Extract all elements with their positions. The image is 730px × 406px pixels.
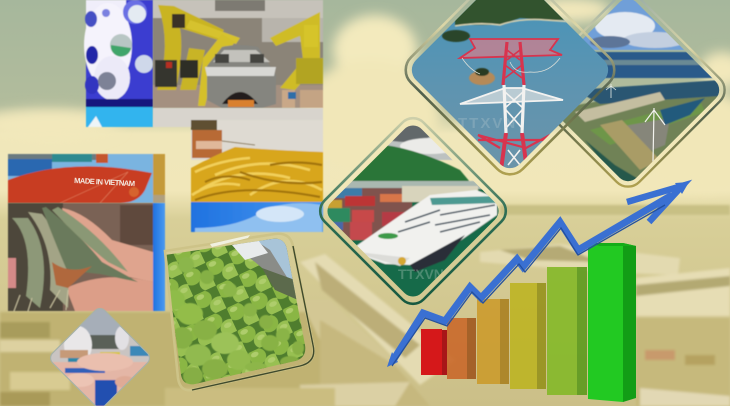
3D bar chart — [421, 243, 636, 402]
bar: orange — [447, 318, 476, 379]
bar: red — [421, 329, 447, 375]
durian frame — [165, 234, 314, 390]
bar: amber — [477, 299, 509, 384]
photo: rice harvest — [153, 108, 323, 232]
wind farm frame — [525, 0, 730, 193]
power pylon frame — [398, 0, 622, 182]
rising blue arrow — [387, 182, 689, 367]
watermark: TTXVN — [398, 266, 444, 282]
photo: biotech molecule hand — [84, 0, 153, 127]
bar: green — [588, 243, 636, 402]
photo: cruise ship and container port with frame — [318, 117, 508, 306]
photo: seafood processing workers — [50, 308, 150, 406]
photo: durian fruit pile with frame — [160, 230, 315, 390]
port frame — [314, 112, 512, 310]
watermark: TTXVN — [458, 115, 517, 132]
seafood frame — [48, 306, 152, 406]
photo: robots on car assembly line — [153, 0, 323, 108]
photo: shrimp in hands — [8, 203, 165, 311]
photo: red cargo ship made in Vietnam — [8, 154, 165, 203]
ship text: MADE IN VIETNAM — [74, 176, 135, 188]
photo: offshore wind farm with frame — [558, 0, 726, 188]
bar: lime — [547, 267, 587, 395]
photo: red and white power pylon with frame — [398, 0, 622, 182]
bar: yellow — [510, 283, 546, 389]
